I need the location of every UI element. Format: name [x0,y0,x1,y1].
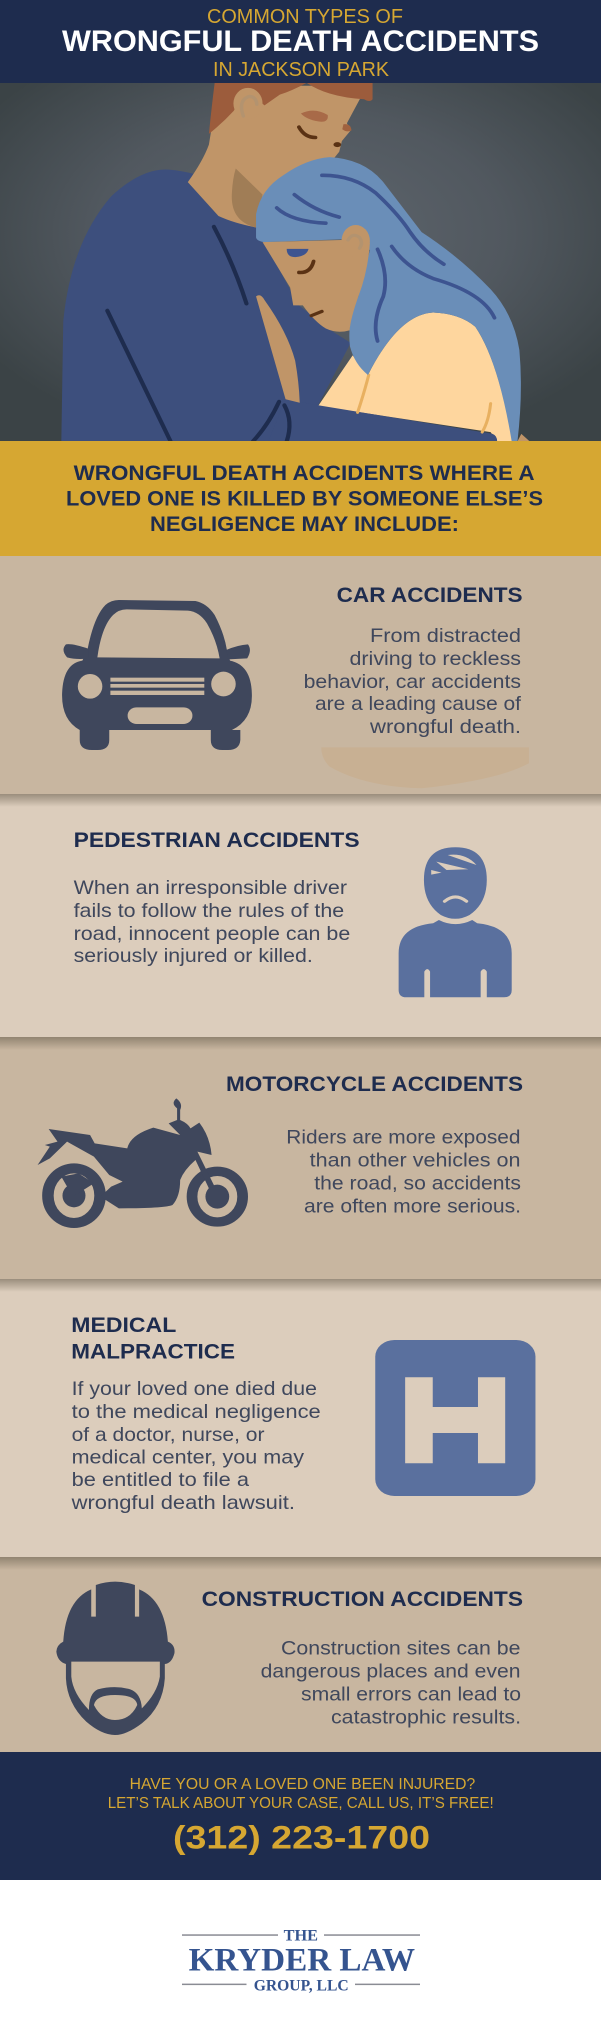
woman's hair strands [277,175,494,341]
heading: medical malpractice: MALPRACTICE [71,1340,235,1364]
text: motorcycle accidents description: are often more serious. [304,1196,521,1218]
text: pedestrian accidents description: road, innocent people can be [74,923,350,945]
heading: car accidents: CAR ACCIDENTS [337,584,523,607]
heading: pedestrian accidents: PEDESTRIAN ACCIDENTS [74,829,360,852]
text: construction accidents description: small errors can lead to [301,1684,521,1706]
icon: car [62,600,252,750]
call to action text: LET’S TALK ABOUT YOUR CASE, CALL US, IT’S FREE! [108,1795,494,1812]
man's eye, brow and nose [299,111,351,147]
text: construction accidents description [261,1638,521,1728]
banner heading: WRONGFUL DEATH ACCIDENTS WHERE A [74,462,535,485]
panel: medical malpractice [0,1279,601,1557]
woman's top folds [358,375,491,432]
woman's ear [342,225,370,257]
text: pedestrian accidents description: seriously injured or killed. [74,945,313,967]
icon: motorcycle [38,1098,243,1223]
woman's facial features [287,249,322,316]
fingers at lower right [517,434,530,441]
icon: construction worker with helmet [56,1582,175,1735]
text: construction accidents description: catastrophic results. [331,1706,521,1728]
sweater sleeve [268,399,497,441]
heading: medical malpractice [71,1314,235,1364]
logo: The Kryder Law Group, LLC [182,1928,420,1995]
text: car accidents description: driving to reckless [350,648,521,670]
heading: motorcycle accidents: MOTORCYCLE ACCIDENTS [226,1073,523,1096]
man's neck and face [188,86,368,227]
text: pedestrian accidents description [74,877,350,967]
icon: hospital sign [375,1340,535,1496]
woman's face [263,240,370,332]
decorative blotch [321,747,529,788]
text: motorcycle accidents description [286,1126,521,1218]
text: motorcycle accidents description: the road, so accidents [314,1172,521,1194]
header band [0,0,601,83]
title line 1: COMMON TYPES OF [207,6,403,28]
man's ear [233,88,263,119]
woman's hair [256,157,521,441]
woman's top [318,312,512,441]
text: medical malpractice description: of a doctor, nurse, or [72,1424,265,1446]
text: car accidents description: From distracted [370,625,521,647]
sweater fold lines [107,227,289,441]
logo: The Kryder Law Group, LLC: GROUP, LLC [254,1978,349,1995]
text: car accidents description: wrongful death. [369,716,521,738]
text: pedestrian accidents description: When an irresponsible driver [74,877,348,899]
panel: pedestrian accidents [0,794,601,1037]
text: car accidents description: are a leading cause of [315,693,522,715]
text: construction accidents description: Construction sites can be [281,1638,520,1660]
text: medical malpractice description: If your loved one died due [72,1378,317,1400]
panel: motorcycle accidents [0,1037,601,1279]
main title: WRONGFUL DEATH ACCIDENTS [62,25,539,58]
call to action text [108,1776,494,1812]
heading: construction accidents: CONSTRUCTION ACCIDENTS [202,1588,523,1611]
text: construction accidents description: dangerous places and even [261,1660,520,1682]
panel: construction accidents [0,1557,601,1752]
gold intro banner [0,441,601,556]
text: motorcycle accidents description: than other vehicles on [310,1150,520,1172]
text: medical malpractice description: medical center, you may [72,1446,304,1468]
banner heading [66,462,543,536]
text: motorcycle accidents description: Riders are more exposed [286,1126,520,1148]
text: medical malpractice description [70,1378,321,1514]
call to action text: HAVE YOU OR A LOVED ONE BEEN INJURED? [130,1776,476,1793]
title line 3: IN JACKSON PARK [213,59,390,81]
phone number: (312) 223-1700 [173,1820,430,1856]
man's hand [256,295,300,403]
text: pedestrian accidents description: fails to follow the rules of the [74,900,344,922]
text: medical malpractice description: be entitled to file a [72,1469,249,1491]
text: medical malpractice description: wrongful death lawsuit. [70,1492,295,1514]
text: car accidents description: behavior, car accidents [304,671,521,693]
call to action band [0,1752,601,1880]
banner heading: LOVED ONE IS KILLED BY SOMEONE ELSE’S [66,488,543,510]
banner heading: NEGLIGENCE MAY INCLUDE: [150,513,459,536]
icon: injured person [399,847,512,997]
heading: medical malpractice: MEDICAL [71,1314,176,1337]
man's hair [209,83,373,134]
man's sweater [61,170,497,441]
logo: The Kryder Law Group, LLC: KRYDER LAW [189,1943,415,1979]
neck shadow [232,169,263,227]
illustration: grieving couple embracing [0,83,601,441]
panel: car accidents [0,556,601,794]
logo: The Kryder Law Group, LLC: THE [284,1928,318,1945]
text: medical malpractice description: to the medical negligence [72,1401,321,1423]
text: car accidents description [304,625,522,738]
